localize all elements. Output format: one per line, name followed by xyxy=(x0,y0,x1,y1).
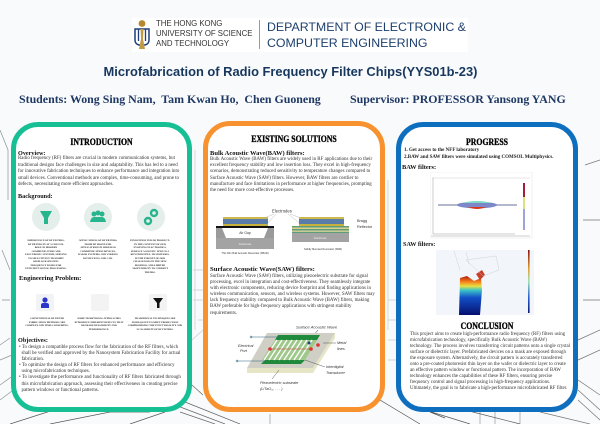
icon: funnel xyxy=(32,203,60,231)
icon: funnel dark xyxy=(149,294,167,311)
background caption 2: APPLICATIONS OF RF FILTERS: xyxy=(79,239,117,242)
SAW text xyxy=(210,273,375,316)
SAW filters label: SAW filters: xyxy=(403,241,435,248)
objectives text: • To optimize the design of RF filters for enhanced performance and efficiency xyxy=(19,363,175,368)
overview text xyxy=(18,155,180,187)
BAW text: manufacture and face limitations in performance at higher frequencies, prompting xyxy=(210,182,372,187)
conclusion text: This project aims to create high-performance radio frequency (RF) filters using xyxy=(410,332,565,337)
conclusion text: technology. The process involves transferring circuit patterns onto a single crystal xyxy=(410,344,570,349)
background caption 2: RADAR SYSTEMS, AND VARIOUS xyxy=(78,253,118,256)
SAW diagram: lines xyxy=(337,347,345,351)
objectives text xyxy=(19,344,181,393)
background caption 2 xyxy=(78,239,118,260)
SMR stack: Solidly Mounted Resonator (SMR) xyxy=(304,248,342,251)
panel: existing solutions xyxy=(203,121,385,412)
SAW text: with electronic components, reducing device footprint and finding applications in xyxy=(210,286,371,291)
SAW text: wireless communication, sensors, and wireless systems. However, SAW filters may xyxy=(210,292,375,297)
SAW diagram xyxy=(236,324,346,391)
problem caption 2 xyxy=(74,317,124,330)
BAW simulation plot xyxy=(430,172,532,238)
SAW diagram: Port xyxy=(240,349,248,353)
SMR stack: Substrate xyxy=(314,236,327,240)
SAW diagram: Electrical xyxy=(238,344,254,348)
title: Microfabrication of Radio Frequency Filter Chips(YYS01b-23) xyxy=(104,64,477,79)
background caption 3: TRENDS. xyxy=(145,270,155,274)
SAW diagram: Metal xyxy=(337,341,346,345)
SAW diagram: Transducer xyxy=(326,371,346,375)
SMR stack xyxy=(292,217,373,251)
university name: AND TECHNOLOGY xyxy=(156,39,229,48)
icon: HKUST emblem xyxy=(134,20,150,49)
FBAR stack: Thin Film Bulk Acoustic Resonator (FBAR) xyxy=(221,252,269,255)
background caption 1 xyxy=(25,239,67,270)
background caption 1: EFFICIENT SIGNAL PROCESSING. xyxy=(25,267,67,270)
background caption 3: EVOLVING ELECTRONICS, xyxy=(134,246,166,249)
background caption 1: RF FILTERS PLAY A CRUCIAL xyxy=(28,242,64,246)
icon: gears xyxy=(137,203,165,231)
students: Students: Wong Sing Nam, Tam Kwan Ho, Chen Guoneng xyxy=(19,92,321,106)
problem caption 3: SCALABILITY OF RF FILTERS. xyxy=(137,328,173,330)
panel: introduction xyxy=(11,122,192,412)
panel: progress xyxy=(396,122,578,412)
problem caption 3: COMPROMISING THE FUNCTIONALITY AND xyxy=(128,324,182,327)
background heading: Background: xyxy=(18,193,53,200)
SAW text: Surface Acoustic Wave (SAW) filters, utilizing piezoelectric substrate for signal xyxy=(210,274,368,279)
FBAR stack: Air Gap xyxy=(239,231,251,235)
problem caption 2: SOME TRADITIONAL APPROACHES xyxy=(77,317,121,320)
SAW diagram: Piezoelectric substrate xyxy=(260,381,298,385)
SAW text: processing, excel in integration and cost-effectiveness. They seamlessly integrate xyxy=(210,280,370,285)
BAW text: excellent frequency stability and low insertion loss. They excel in high-frequency xyxy=(210,163,371,168)
BAW filters label: BAW filters: xyxy=(402,164,436,171)
supervisor: Supervisor: PROFESSOR Yansong YANG xyxy=(350,92,566,106)
SMR stack: Bragg xyxy=(357,219,367,223)
department name: DEPARTMENT OF ELECTRONIC & xyxy=(267,20,466,34)
department name xyxy=(259,20,467,49)
problem caption 1: COMPLEX AND TIME-CONSUMING. xyxy=(25,324,69,327)
SAW heading: Surface Acoustic Wave(SAW) filters: xyxy=(210,266,315,273)
conclusion text: onto a pre-coated photoresist thin layer on the wafer or dielectric layer to create xyxy=(410,362,566,367)
background caption 1: COMMUNICATION AND xyxy=(32,250,60,252)
FBAR stack xyxy=(216,217,274,255)
background caption 3 xyxy=(130,239,170,274)
conclusion text: frequency control and signal processing in high-frequency applications. xyxy=(410,380,550,385)
objectives heading: Objectives: xyxy=(18,337,48,344)
SAW text: BAW preferable for high-frequency applications with stringent stability xyxy=(210,304,351,309)
heading: introduction: INTRODUCTION xyxy=(70,138,133,148)
problem caption 3 xyxy=(128,317,182,330)
engineering problem heading: Engineering Problem: xyxy=(19,275,81,282)
background caption 1: ROLE IN MODERN xyxy=(35,246,57,249)
university name xyxy=(156,19,252,48)
background caption 1: ELECTRONIC SYSTEMS, SERVING xyxy=(25,253,67,256)
overview text: small devices. Conventional methods are complex, time-consuming, and prone to xyxy=(18,176,179,181)
icon: blank tile xyxy=(91,294,109,311)
SMR stack: Reflector xyxy=(357,225,373,229)
electrodes label: Electrodes xyxy=(272,208,292,214)
SAW diagram: (LiTaO₃, . . . ) xyxy=(260,387,283,391)
conclusion text: Ultimately, the goal is to fabricate a high-performance microfabricated RF filter. xyxy=(410,386,567,391)
conclusion text: an effective pattern window or functional pattern. The incorporation of BAW xyxy=(410,368,561,373)
logo header xyxy=(132,18,468,52)
BAW text xyxy=(210,156,372,193)
overview text: defects, necessitating more efficient approaches. xyxy=(18,182,114,187)
conclusion text: surface or dielectric layer. Prefabricated devices on a mask are exposed through xyxy=(410,350,566,355)
heading: progress: PROGRESS xyxy=(466,138,508,148)
overview text: traditional designs face challenges in size and adaptability. This has led to a need xyxy=(18,163,178,168)
BAW text: scenarios, demonstrating reduced sensitivity to temperature changes compared to xyxy=(210,169,370,174)
problem caption 3: TRADITIONAL TECHNIQUES ARE xyxy=(135,317,175,320)
heading: conclusion: CONCLUSION xyxy=(461,322,513,332)
objectives text: fabrication. xyxy=(21,357,44,362)
background caption 2: IOT DEVICES, AND CAR. xyxy=(83,256,113,260)
conclusion text xyxy=(410,331,570,391)
background caption 3: ADAPTABILITY TO CURRENT xyxy=(132,267,168,270)
problem caption 2: DEGRADE RELIABILITY AND xyxy=(81,324,117,327)
progress steps: 1. Get access to the NFF laboratory xyxy=(404,148,479,153)
background caption 1: TO SELECTIVELY TRANSMIT xyxy=(28,256,64,260)
problem caption 1: CONVENTIONAL RF FILTER xyxy=(30,317,64,320)
university name: THE HONG KONG xyxy=(156,19,222,28)
university name: UNIVERSITY OF SCIENCE xyxy=(156,29,252,38)
conclusion text: technology enhances the capabilities of these RF filters, ensuring precise xyxy=(410,374,552,379)
SAW diagram: Interdigital xyxy=(326,365,344,369)
conclusion text: the exposure system. Alternatively, the circuit pattern is accurately transferred xyxy=(410,356,562,361)
background caption 3: CHALLENGES IN THE NEW xyxy=(133,260,167,263)
electrodes label xyxy=(262,208,304,225)
background caption 1: OR BLOCK SPECIFIC xyxy=(33,260,59,263)
SAW text: requirements. xyxy=(210,311,237,316)
BAW text: Bulk Acoustic Wave (BAW) filters are widely used in RF applications due to their xyxy=(210,157,372,162)
SAW diagram: Surface Acoustic Wave xyxy=(296,324,338,330)
background caption 2: COMMUNICATION DEVICES, xyxy=(80,250,116,252)
background caption 3: SURFACE ACOUSTIC WAVE IS A xyxy=(131,250,169,252)
BAW text: Surface Acoustic Wave (SAW) filters. However, BAW filters are costlier to xyxy=(210,176,358,181)
background caption 2: APPLICATIONS IN WIRELESS xyxy=(80,246,116,249)
background caption 1: FREQUENCY BANDS FOR xyxy=(31,264,61,266)
progress steps xyxy=(404,148,554,160)
SAW text: lack frequency stability compared to Bulk Acoustic Wave (BAW) filters, making xyxy=(210,298,369,303)
objectives text: using microfabrication techniques. xyxy=(21,369,90,374)
overview text: Radio frequency (RF) filters are crucial in modern communication systems, but xyxy=(18,156,175,161)
objectives text: shall be verified and approved by the Nanosystem Fabrication Facility for actual xyxy=(21,351,180,356)
background caption 3: INNOVATION IN RAW PRODUCT: xyxy=(130,239,170,242)
progress steps: 2.BAW and SAW filters were simulated using COMSOL Multiphysics. xyxy=(404,155,553,160)
problem caption 2: PERFORMANCE. xyxy=(89,328,109,330)
overview heading: Overview: xyxy=(18,150,46,157)
icon: people xyxy=(84,203,112,231)
icon: user xyxy=(36,294,54,311)
conclusion text: microfabrication technology, specifically Bulk Acoustic Wave (BAW) xyxy=(410,338,547,343)
problem caption 2: INTRODUCE INHERENT DEFECTS THAT xyxy=(75,320,123,324)
problem caption 1 xyxy=(25,317,69,327)
overview text: for innovative fabrication techniques to enhance performance and integration into xyxy=(18,169,179,174)
FBAR stack: Substrate xyxy=(239,242,252,246)
background caption 3: KEY PRINCIPLE, TRANSITIONS, xyxy=(131,253,169,256)
department name: COMPUTER ENGINEERING xyxy=(267,36,427,50)
background caption 1: IMPORTANCE OF RF FILTERS: xyxy=(28,239,64,242)
SAW simulation plot xyxy=(436,250,534,315)
background caption 3: IN THE PURSUIT OF OUR xyxy=(135,256,165,260)
background caption 3: BUSINESS, AND LIMITED xyxy=(135,264,165,266)
background caption 3: IN THE CONTEXT OF OUR xyxy=(134,242,166,246)
heading: existing solutions: EXISTING SOLUTIONS xyxy=(251,135,337,145)
objectives text: • To design a compatible process flow for the fabrication of the RF filters, which xyxy=(19,345,178,350)
problem caption 3: INADEQUATE TO MEET PRODUCTION xyxy=(132,320,178,324)
problem caption 1: FABRICATION METHODS ARE xyxy=(29,320,65,324)
objectives text: this microfabrication approach, assessing their effectiveness in creating precise xyxy=(21,382,178,387)
BAW heading: Bulk Acoustic Wave(BAW) filters: xyxy=(210,150,305,157)
objectives text: pattern windows or functional patterns. xyxy=(21,388,99,393)
objectives text: • To investigate the performance and functionality of RF filters fabricated through xyxy=(19,375,181,380)
BAW text: the need for more cost-effective processes. xyxy=(210,188,294,193)
BAW diagrams xyxy=(216,208,373,255)
background caption 2: FROM RF FRONT-END xyxy=(85,242,111,246)
